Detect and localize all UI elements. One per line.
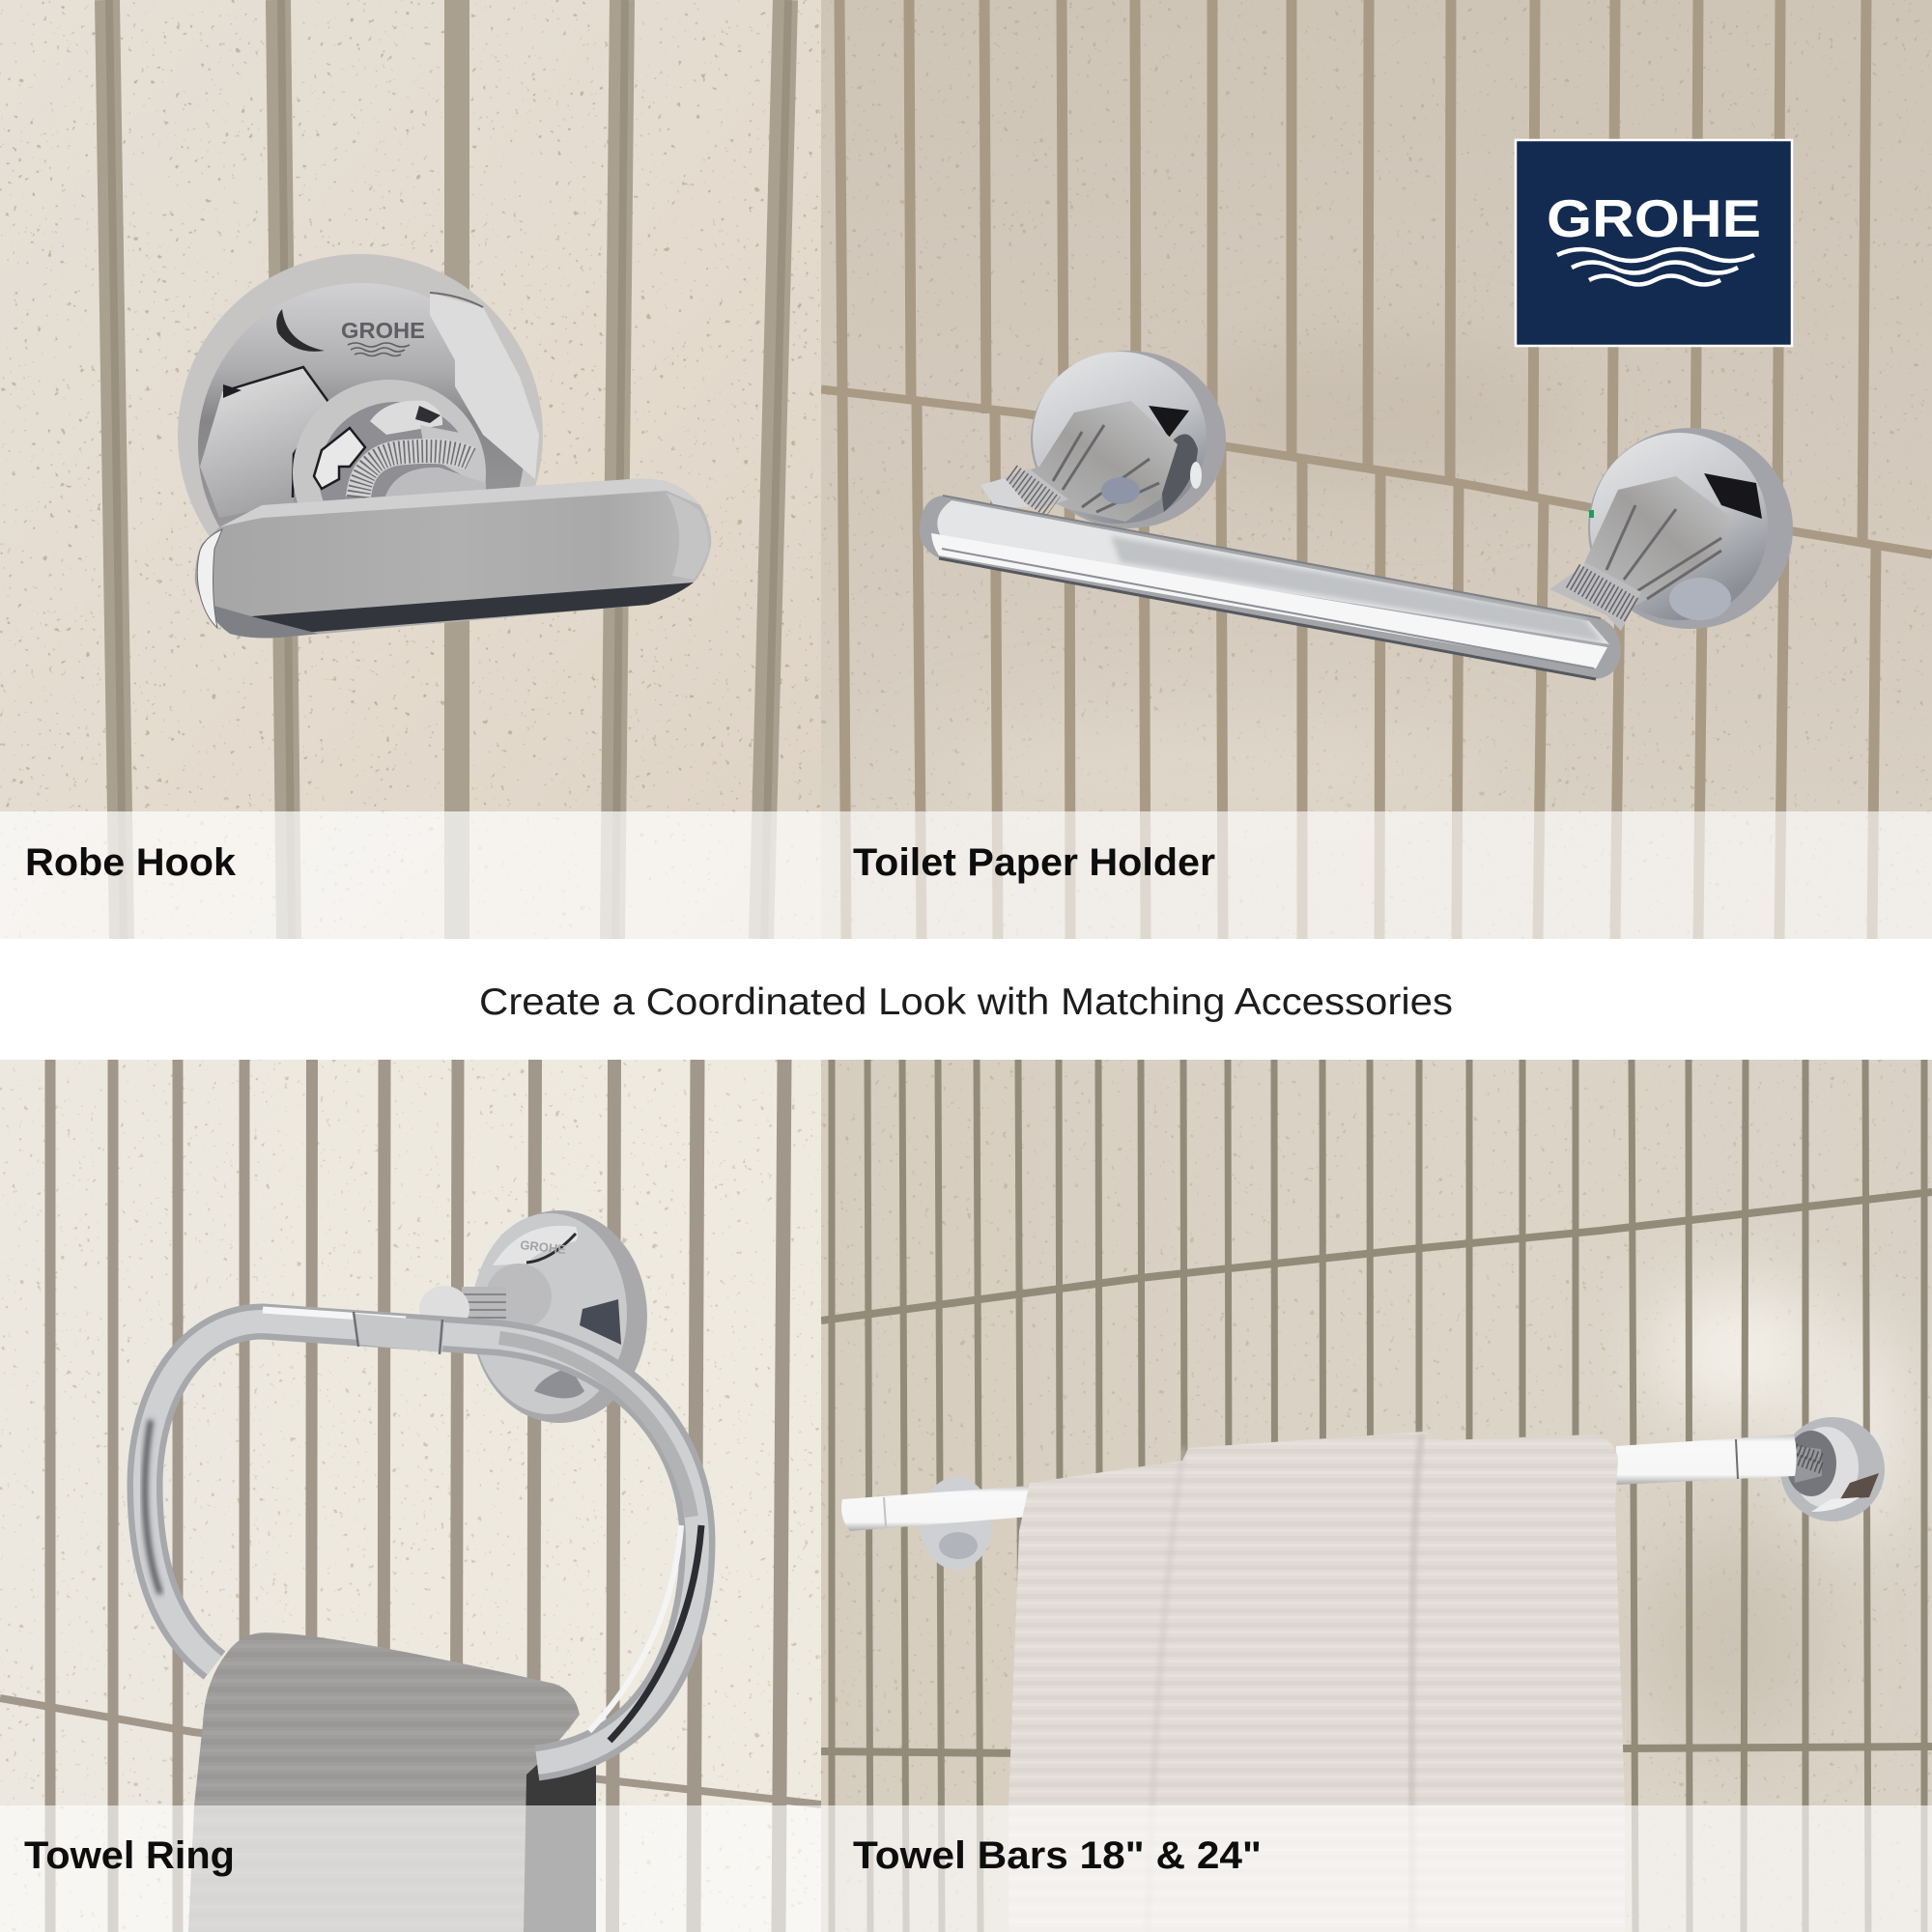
icon: right towel bar mount (1616, 1417, 1885, 1521)
panel: robe hook (0, 0, 821, 939)
caption band: robe hook (0, 811, 821, 939)
caption band: towel bars (821, 1805, 1932, 1932)
icon: left towel bar mount (841, 1477, 1030, 1570)
panel: towel ring (0, 1060, 821, 1932)
caption: towel ring: Towel Ring (24, 1834, 235, 1877)
caption: toilet paper holder: Toilet Paper Holder (853, 841, 1215, 884)
hook bar (195, 479, 711, 638)
engraved logo on ring mount: GROHE (520, 1237, 567, 1257)
center tagline: Create a Coordinated Look with Matching Accessories (479, 981, 1453, 1023)
icon: robe hook (178, 254, 711, 638)
panel: towel bars (821, 1060, 1932, 1932)
right mount (1549, 428, 1793, 631)
caption band: towel ring (0, 1805, 821, 1932)
icon: wall mount (419, 1210, 647, 1423)
tile wall: towel bars (821, 1060, 1932, 1932)
left mount (980, 351, 1226, 528)
towel: gray (188, 1633, 596, 1932)
tile wall: towel ring (0, 1060, 821, 1932)
tile wall: robe hook (0, 0, 821, 939)
panel: toilet paper holder (821, 0, 1932, 939)
knurled ring (358, 451, 470, 497)
holder bar (920, 496, 1621, 679)
icon: toilet paper holder (920, 351, 1793, 679)
logo: GROHE (1516, 140, 1792, 346)
tile wall: toilet paper holder (821, 0, 1932, 939)
caption: robe hook: Robe Hook (25, 841, 237, 884)
icon: towel ring (145, 1310, 701, 1763)
engraved logo on hook: GROHE (341, 318, 425, 343)
caption band: toilet paper holder (821, 811, 1932, 939)
logo: GROHE: GROHE (1547, 188, 1761, 248)
towel: white (1009, 1432, 1625, 1932)
caption: towel bars: Towel Bars 18" & 24" (853, 1834, 1262, 1877)
